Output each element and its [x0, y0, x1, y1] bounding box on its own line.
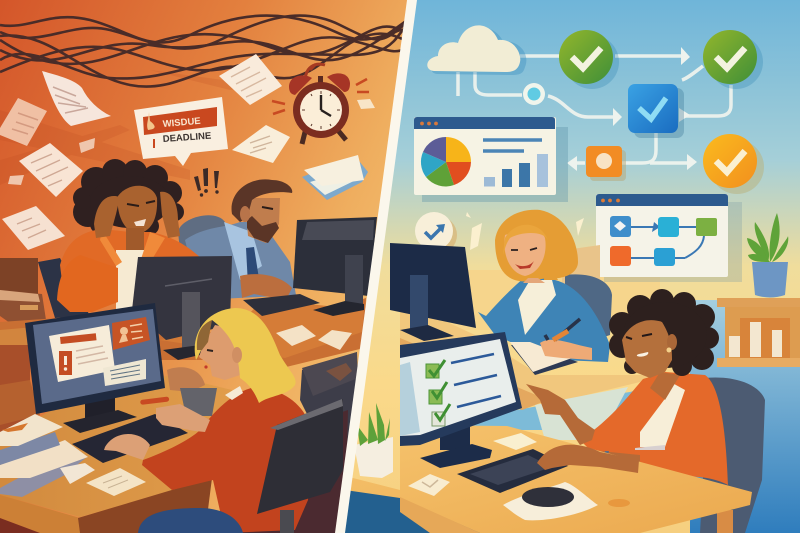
connector node [523, 83, 545, 105]
blonde colleague's chair [565, 274, 612, 350]
keyboard [72, 414, 188, 463]
alert label: WISDUE [162, 116, 201, 130]
warning icon [147, 112, 155, 130]
cabinet [300, 352, 358, 444]
dashboard window [414, 117, 568, 202]
flying paper 1 [42, 71, 111, 126]
green check 2 [703, 30, 763, 89]
sticky note [493, 433, 537, 450]
blonde colleague's monitor [390, 243, 476, 341]
paper scraps [8, 138, 95, 185]
man's monitor [293, 217, 377, 316]
connector arrowheads [567, 47, 697, 171]
orange node [586, 146, 626, 181]
front desk [345, 425, 752, 533]
floor [240, 410, 348, 533]
check row 3 [432, 404, 450, 426]
panel: chaotic office [0, 0, 420, 533]
speech bubble deadline alert [134, 97, 228, 166]
man's keyboard [243, 294, 320, 316]
wall shadow streaks [96, 71, 233, 180]
flying paper 5 [219, 54, 282, 105]
wall lower blue under back desk [400, 375, 690, 430]
woman's monitor [132, 256, 232, 360]
text lines [483, 140, 542, 151]
writing hand and pen [540, 319, 592, 360]
blue check square [628, 84, 684, 138]
workflow connectors [458, 56, 731, 163]
check row 2 [429, 382, 447, 404]
pen on desk [140, 396, 169, 405]
list lines [451, 354, 501, 407]
flying paper 4 [2, 206, 65, 250]
curly colleague [526, 289, 728, 485]
bar chart [484, 154, 548, 187]
paper stack [0, 414, 95, 497]
foreground monitor [25, 303, 165, 433]
small plant [354, 403, 393, 478]
desk leg [717, 510, 733, 533]
check row 1 [426, 360, 445, 378]
front desk [0, 375, 232, 533]
back desk right [400, 300, 650, 405]
storage crates [0, 380, 40, 425]
blonde colleague [478, 210, 610, 362]
wall background [330, 0, 800, 533]
curly colleague's chair [700, 377, 765, 533]
flying paper 3 [19, 143, 83, 197]
notebook [510, 342, 578, 375]
flying paper 6 [232, 125, 290, 163]
back desk [0, 298, 366, 368]
tangled wires [0, 16, 410, 87]
man at desk [185, 179, 296, 300]
potted plant [747, 213, 788, 298]
lower blue wall [690, 300, 800, 533]
sticky note [357, 99, 375, 109]
woman's chair [38, 258, 90, 318]
man's chair [178, 215, 225, 247]
white diagonal divider [335, 0, 417, 533]
wall panel [400, 270, 660, 330]
deadline label: DEADLINE [162, 131, 212, 145]
mug [180, 388, 217, 416]
exclamation marks [194, 168, 219, 197]
envelopes [302, 155, 368, 200]
mouse pad [503, 482, 598, 520]
wall background [0, 0, 420, 533]
woman with hands on head [57, 159, 206, 312]
storage box [0, 258, 46, 323]
flying paper 2 [0, 98, 47, 146]
blonde woman [104, 308, 308, 533]
note on desk [86, 468, 146, 496]
lower wall shadow [0, 345, 30, 440]
note with check [408, 474, 450, 496]
wall tan shape [560, 245, 600, 300]
cloud [427, 25, 526, 75]
checklist monitor [400, 332, 522, 468]
mouse [522, 487, 574, 507]
hand on keyboard [537, 445, 639, 473]
keyboard [457, 449, 568, 493]
green check 1 [559, 30, 619, 89]
alarm clock [272, 64, 369, 144]
blonde woman's chair back [257, 399, 343, 533]
pie chart [421, 137, 471, 186]
desk notes [276, 325, 352, 350]
panel: organised office [330, 0, 800, 533]
red tick [153, 139, 155, 148]
check badge [415, 212, 457, 254]
blonde woman's far hand [167, 367, 205, 392]
amber check [703, 134, 764, 194]
sparkle papers [466, 212, 584, 250]
shelf [717, 298, 800, 367]
desk stain [608, 499, 630, 507]
flow chart window [596, 194, 742, 282]
